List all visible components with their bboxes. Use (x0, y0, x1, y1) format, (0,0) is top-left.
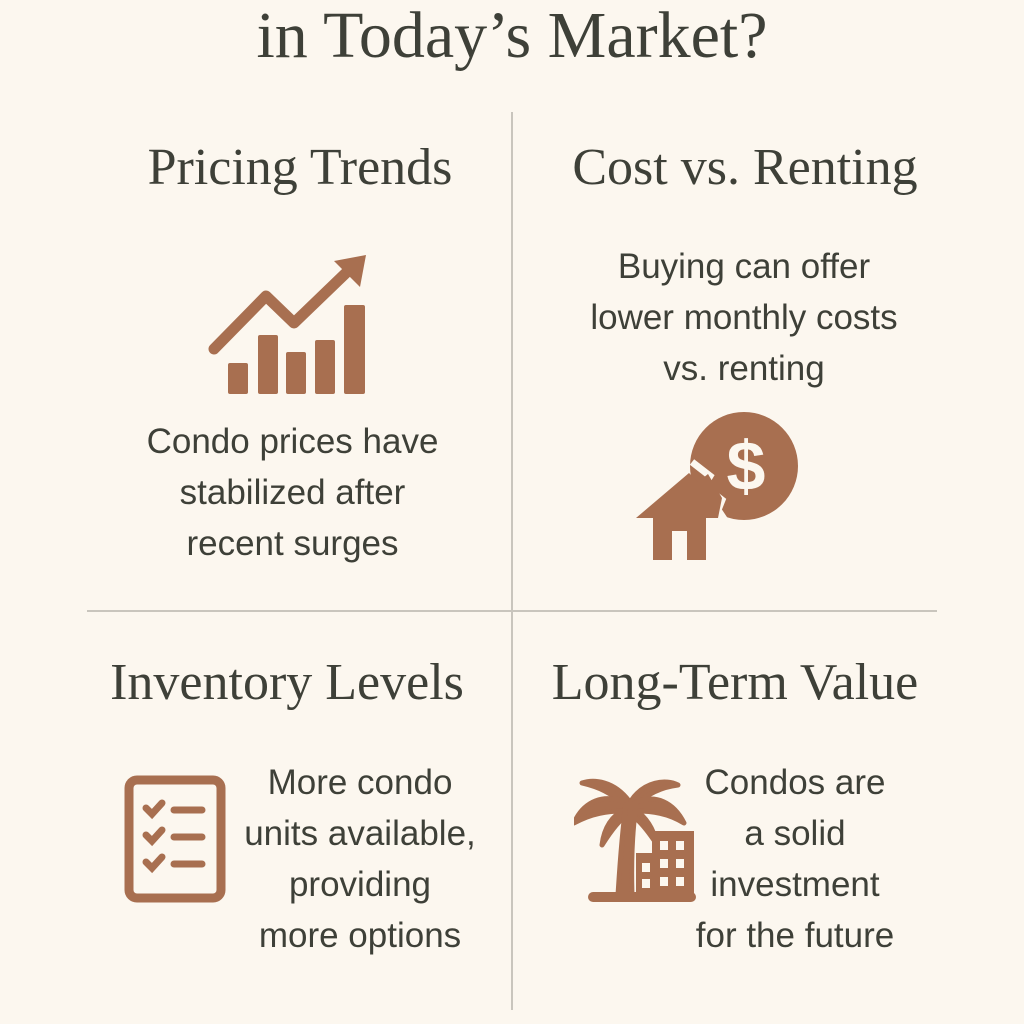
panel: cost vs renting (572, 139, 918, 560)
divider vertical (511, 112, 513, 1010)
title: in Today’s Market? (256, 0, 768, 72)
panel: inventory levels (110, 654, 476, 955)
text: pricing: Condo prices have (147, 422, 438, 461)
text: cost: vs. renting (663, 349, 825, 388)
text: pricing: stabilized after (180, 473, 405, 512)
heading: long-term value: Long-Term Value (552, 654, 918, 711)
icon: house and dollar (636, 412, 798, 560)
divider horizontal (87, 610, 937, 612)
text: pricing: recent surges (186, 524, 399, 563)
text: pricing (147, 422, 438, 563)
text: inventory: more options (259, 916, 461, 955)
text: cost (590, 247, 898, 388)
text: inventory: units available, (244, 814, 476, 853)
heading: inventory levels: Inventory Levels (110, 654, 464, 711)
icon: checklist (124, 776, 226, 902)
panel: pricing trends (147, 139, 452, 563)
text: inventory: More condo (268, 763, 452, 802)
icon: palm tree and building (574, 778, 696, 902)
heading: cost vs renting: Cost vs. Renting (572, 139, 918, 196)
icon: bar chart with arrow (208, 255, 366, 394)
text: inventory (244, 763, 476, 955)
text: cost: lower monthly costs (590, 298, 898, 337)
panel: long-term value (552, 654, 918, 955)
text: long-term: a solid (744, 814, 846, 853)
text: long-term: investment (710, 865, 880, 904)
text: long-term (696, 763, 894, 955)
text: long-term: for the future (696, 916, 894, 955)
text: long-term: Condos are (705, 763, 885, 802)
text: inventory: providing (289, 865, 431, 904)
heading: pricing trends: Pricing Trends (148, 139, 452, 196)
text: cost: Buying can offer (618, 247, 870, 286)
icon: house and dollar: $ (727, 427, 765, 505)
